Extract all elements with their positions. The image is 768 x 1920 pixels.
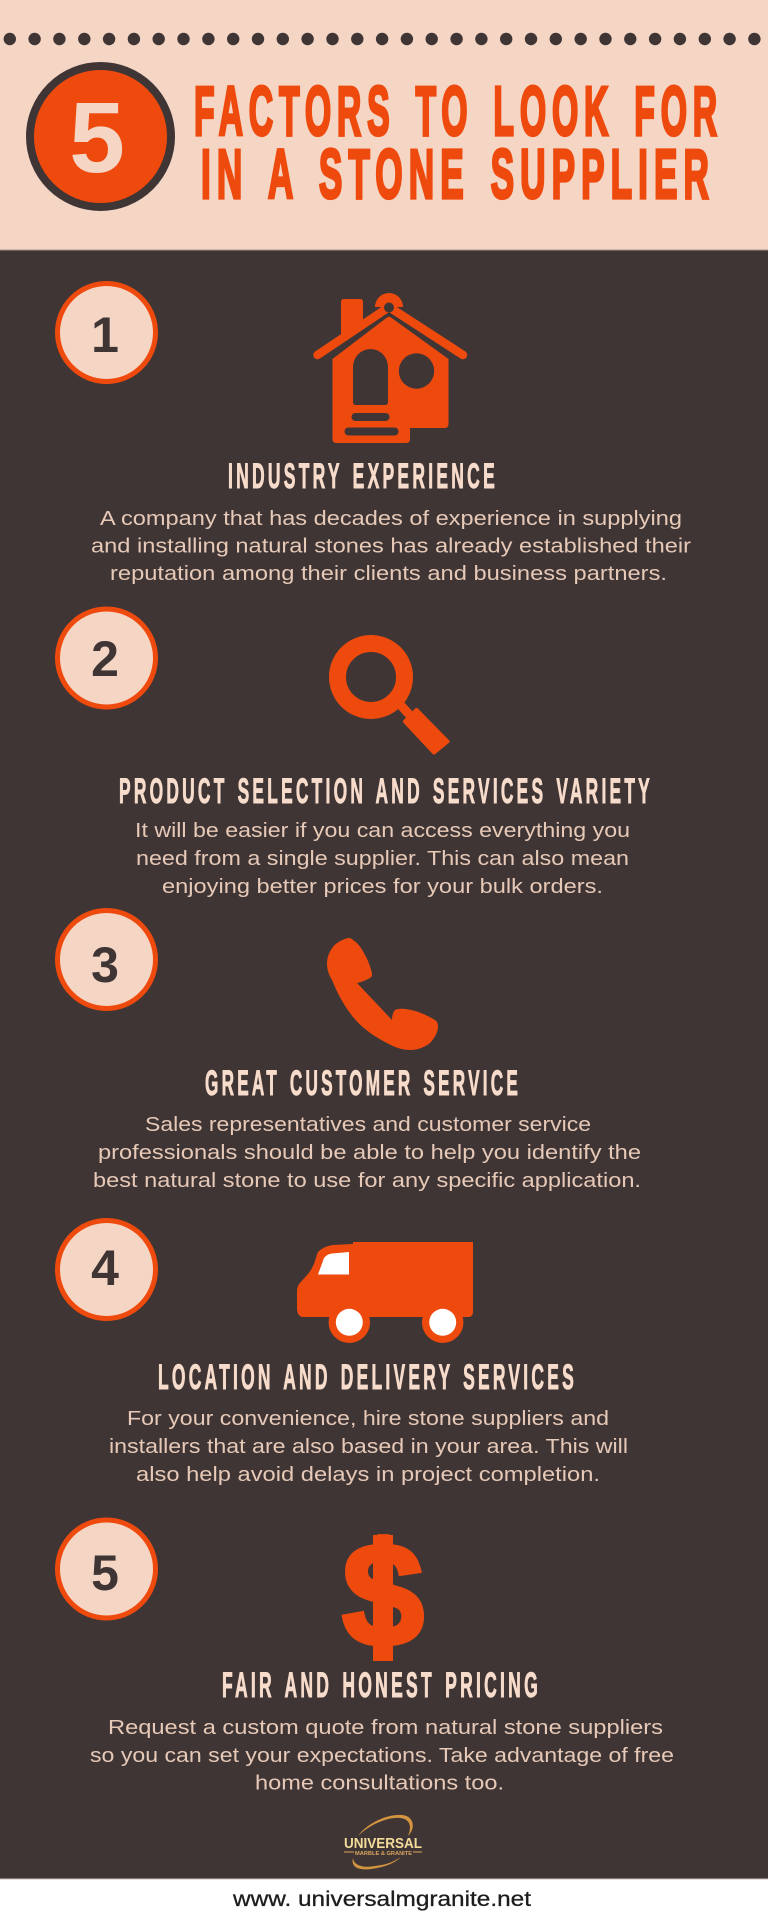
number badge 4 xyxy=(58,1220,156,1318)
icon: truck xyxy=(297,1242,473,1343)
body text: For your convenience, hire stone suppliers and xyxy=(127,1407,609,1430)
body text: home consultations too. xyxy=(255,1772,504,1794)
section 1: industry experience xyxy=(58,284,691,585)
body text xyxy=(109,1407,628,1486)
title xyxy=(194,72,723,213)
logo: Universal Marble & Granite: MARBLE & GRANITE xyxy=(355,1851,412,1857)
panel: header xyxy=(0,0,768,250)
number badge 3: 3 xyxy=(91,937,119,993)
section 2: product selection xyxy=(58,609,653,898)
body text xyxy=(93,1113,641,1192)
body text: reputation among their clients and business partners. xyxy=(110,562,667,585)
body text: Request a custom quote from natural stone suppliers xyxy=(108,1716,663,1739)
number badge 5 xyxy=(58,1520,156,1618)
number badge 4: 4 xyxy=(91,1240,119,1296)
body text: need from a single supplier. This can also mean xyxy=(136,847,629,870)
number badge 5: 5 xyxy=(91,1545,119,1601)
icon: house xyxy=(318,293,463,443)
body text xyxy=(90,1716,674,1794)
body text: Sales representatives and customer service xyxy=(145,1113,591,1136)
website url: www. universalmgranite.net xyxy=(232,1888,531,1911)
body text: It will be easier if you can access everything you xyxy=(135,819,630,842)
badge: big number 5: 5 xyxy=(69,82,125,194)
icon: magnifying glass xyxy=(338,644,448,752)
dotted row xyxy=(4,33,761,45)
body text: and installing natural stones has already established their xyxy=(91,534,691,558)
section 4: location and delivery xyxy=(58,1220,628,1486)
body text xyxy=(91,507,691,585)
number badge 1: 1 xyxy=(91,307,119,363)
logo: Universal Marble & Granite: UNIVERSAL xyxy=(344,1835,422,1852)
body text: best natural stone to use for any specific application. xyxy=(93,1169,641,1192)
body text: also help avoid delays in project completion. xyxy=(136,1463,600,1486)
body text: professionals should be able to help you identify the xyxy=(98,1141,641,1164)
body text xyxy=(135,819,630,898)
badge: big number 5 xyxy=(30,66,171,207)
number badge 3 xyxy=(58,910,156,1008)
panel: footer xyxy=(0,1878,768,1920)
icon: phone xyxy=(327,938,438,1050)
body text: installers that are also based in your area. This will xyxy=(109,1435,628,1458)
icon: dollar sign: $ xyxy=(342,1513,424,1678)
section 5: fair pricing xyxy=(58,1513,674,1794)
number badge 2 xyxy=(58,609,156,707)
number badge 1 xyxy=(58,284,156,382)
logo: Universal Marble & Granite xyxy=(344,1815,422,1869)
number badge 2: 2 xyxy=(91,631,119,687)
body text: so you can set your expectations. Take advantage of free xyxy=(90,1744,674,1767)
heading: INDUSTRY EXPERIENCE xyxy=(228,457,498,496)
body text: A company that has decades of experience in supplying xyxy=(100,507,682,530)
section 3: customer service xyxy=(58,910,641,1192)
body text: enjoying better prices for your bulk orders. xyxy=(162,875,603,898)
